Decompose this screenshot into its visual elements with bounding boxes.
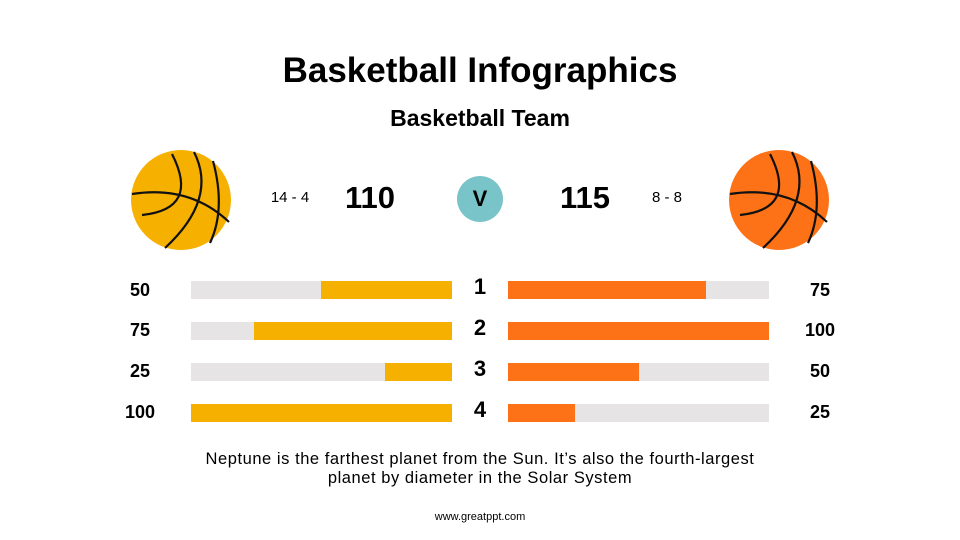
subtitle: Basketball Team <box>390 105 570 131</box>
row 4: 100 <box>125 402 155 422</box>
row 3: 25 <box>130 361 150 381</box>
row 3 <box>130 356 830 381</box>
row 2: 100 <box>805 320 835 340</box>
right score: 115 <box>560 180 610 215</box>
row 3: 50 <box>810 361 830 381</box>
row 2: 2 <box>474 315 486 340</box>
footer url: www.greatppt.com <box>435 511 525 523</box>
description text: Neptune is the farthest planet from the Sun. It’s also the fourth-largest <box>206 450 754 468</box>
versus badge <box>457 176 503 222</box>
row 1: 50 <box>130 280 150 300</box>
icon: yellow basketball <box>131 150 231 250</box>
row 2 <box>130 315 835 340</box>
versus badge: V <box>473 186 487 211</box>
row 4: 4 <box>474 397 486 422</box>
title: Basketball Infographics <box>283 51 677 90</box>
row 4 <box>125 397 830 422</box>
row 1: 1 <box>474 274 486 299</box>
row 4: 25 <box>810 402 830 422</box>
left score: 110 <box>345 180 395 215</box>
row 1 <box>130 274 830 300</box>
row 3: 3 <box>474 356 486 381</box>
row 1: 75 <box>810 280 830 300</box>
icon: orange basketball <box>729 150 829 250</box>
comparison bars <box>125 274 835 422</box>
left record: 14 - 4 <box>271 189 309 206</box>
description text <box>206 450 754 487</box>
right record: 8 - 8 <box>652 189 682 206</box>
row 2: 75 <box>130 320 150 340</box>
description text: planet by diameter in the Solar System <box>328 469 632 487</box>
